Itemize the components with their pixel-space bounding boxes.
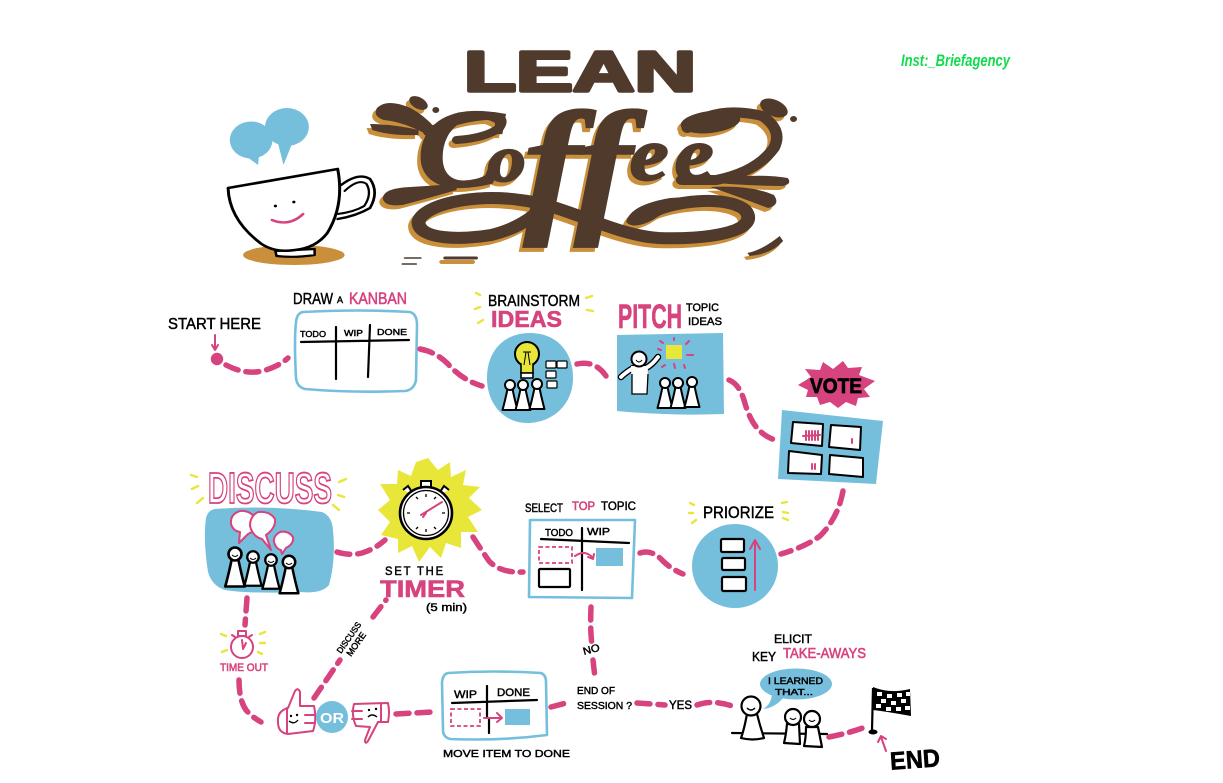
step: brainstorm ideas bbox=[475, 293, 593, 423]
step: draw a kanban: WIP bbox=[344, 328, 363, 338]
label: yes: YES bbox=[669, 698, 692, 712]
path: thumbs up back to timer bbox=[314, 660, 340, 698]
step: move item to done: WIP bbox=[454, 689, 477, 701]
step: draw a kanban bbox=[293, 289, 417, 392]
start here bbox=[168, 316, 261, 365]
path: brainstorm to pitch bbox=[577, 363, 606, 376]
step: priorize: PRIORIZE bbox=[703, 503, 774, 522]
start here: START HERE bbox=[168, 316, 261, 333]
coffee shadow: f bbox=[520, 87, 593, 252]
step: select top topic: TODO bbox=[545, 528, 573, 539]
label: end bbox=[878, 736, 941, 776]
coffee shadow: e bbox=[626, 116, 665, 201]
step: discuss: DISCUSS bbox=[208, 464, 332, 513]
label: no: NO bbox=[582, 642, 601, 658]
path: session to yes bbox=[637, 703, 665, 705]
coffee main: C bbox=[417, 87, 505, 211]
step: pitch topic ideas: IDEAS bbox=[688, 316, 722, 328]
saucer bbox=[243, 245, 345, 265]
step: set the timer: SET THE bbox=[385, 564, 445, 578]
path: start to kanban bbox=[226, 358, 288, 372]
path: take-aways to flag bbox=[829, 726, 868, 737]
coffee main: e bbox=[630, 112, 669, 197]
path: done to end of session bbox=[551, 702, 570, 707]
step: time out: TIME OUT bbox=[220, 662, 268, 674]
step: select top topic: TOPIC bbox=[601, 499, 636, 513]
label: end of session: SESSION ? bbox=[577, 700, 632, 712]
step: move item to done: MOVE ITEM TO DONE bbox=[443, 748, 570, 760]
step: draw a kanban: DONE bbox=[377, 327, 407, 337]
label: end: END bbox=[889, 744, 941, 776]
step: time out bbox=[220, 631, 268, 674]
path: discuss more continuation bbox=[373, 600, 386, 617]
coffee shadow: f bbox=[571, 87, 643, 252]
coffee main: o bbox=[488, 123, 526, 196]
path: thumbs down to done bbox=[396, 712, 433, 714]
path: kanban to brainstorm bbox=[420, 349, 482, 386]
coffee main: e bbox=[675, 112, 714, 197]
step: set the timer bbox=[378, 458, 482, 614]
step: set the timer: (5 min) bbox=[426, 602, 467, 614]
step: elicit key take-aways: KEY bbox=[752, 649, 776, 664]
coffee shadow: o bbox=[484, 127, 522, 200]
speech bubbles bbox=[231, 511, 293, 554]
step: pitch topic ideas bbox=[617, 298, 724, 415]
coffee shadow: C bbox=[414, 91, 502, 215]
step: draw a kanban: A bbox=[337, 295, 343, 305]
step: pitch topic ideas: TOPIC bbox=[686, 302, 719, 314]
title: Coffee lettering bbox=[367, 83, 797, 264]
path: yes to take-aways bbox=[697, 702, 735, 707]
step: brainstorm ideas: IDEAS bbox=[491, 306, 562, 332]
step: select top topic: SELECT bbox=[525, 501, 564, 515]
coffee main: f bbox=[574, 83, 647, 248]
path: discuss to time out bbox=[245, 598, 247, 625]
step: elicit key take-aways bbox=[732, 634, 866, 747]
step: discuss bbox=[191, 464, 346, 593]
path: timer to select bbox=[473, 537, 523, 572]
path: select to priorize bbox=[640, 552, 683, 574]
step: select top topic bbox=[525, 499, 636, 598]
icon: or badge: OR bbox=[320, 710, 344, 727]
coffee shadow bbox=[367, 87, 788, 262]
step: brainstorm ideas: BRAINSTORM bbox=[488, 293, 580, 310]
step: elicit key take-aways: ELICIT bbox=[774, 634, 812, 646]
presenter bbox=[621, 352, 658, 394]
step: vote bbox=[778, 361, 883, 484]
coffee main: f bbox=[524, 83, 596, 248]
step: move item to done: DONE bbox=[497, 687, 530, 699]
path: discuss to timer bbox=[337, 540, 385, 554]
path: select to end of session bbox=[591, 607, 595, 678]
step: draw a kanban: DRAW bbox=[293, 291, 334, 308]
step: set the timer: TIMER bbox=[380, 576, 465, 603]
title: LEAN: LEAN bbox=[464, 40, 696, 104]
icon: stopwatch bbox=[400, 481, 452, 539]
step: draw a kanban: KANBAN bbox=[349, 289, 407, 308]
speech bubbles bbox=[230, 108, 309, 165]
label: end of session: END OF bbox=[577, 685, 615, 697]
step: elicit key take-aways: TAKE-AWAYS bbox=[783, 645, 866, 662]
label: discuss more: MORE bbox=[344, 630, 368, 658]
label: end of session bbox=[577, 685, 632, 712]
speech bubble: I LEARNED bbox=[768, 676, 823, 687]
icon: smiling coffee cup bbox=[228, 108, 375, 265]
step: select top topic: WIP bbox=[587, 527, 610, 538]
step: draw a kanban: TODO bbox=[300, 329, 326, 339]
coffee main bbox=[370, 83, 797, 264]
icon: checkered flag bbox=[868, 687, 911, 734]
path: time out to thumbs up bbox=[239, 680, 261, 722]
step: vote: VOTE bbox=[810, 375, 862, 398]
step: priorize bbox=[689, 502, 788, 608]
credit label: Inst:_Briefagency bbox=[901, 51, 1011, 70]
step: move item to done bbox=[442, 672, 570, 760]
icon: thumbs down bbox=[352, 703, 389, 743]
coffee shadow: e bbox=[671, 116, 710, 201]
label: discuss more: DISCUSS bbox=[334, 620, 363, 655]
icon: light bulb bbox=[515, 342, 539, 378]
step: select top topic: TOP bbox=[572, 499, 595, 513]
path: pitch to vote bbox=[729, 380, 775, 440]
path: vote to priorize bbox=[781, 491, 843, 554]
speech bubble: THAT... bbox=[775, 687, 813, 697]
icon: thumbs up bbox=[278, 689, 315, 734]
step: pitch topic ideas: PITCH bbox=[618, 298, 682, 336]
icon: or badge bbox=[316, 701, 348, 733]
speech bubble bbox=[760, 668, 832, 709]
